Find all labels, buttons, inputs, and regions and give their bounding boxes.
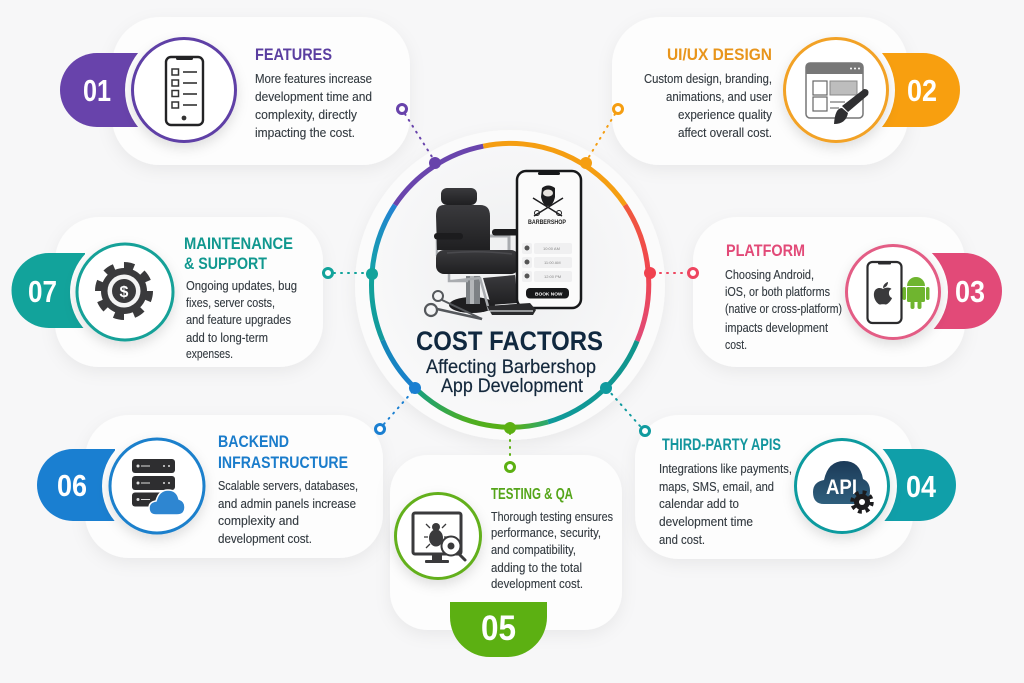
headrest: [441, 188, 477, 205]
subheading line 2: App Development: [441, 376, 584, 397]
card: [55, 217, 323, 367]
description: [491, 510, 613, 591]
colored ring: [372, 143, 649, 427]
number: 06: [57, 468, 87, 503]
number tab: [60, 53, 140, 127]
seat cushion: [436, 250, 519, 274]
panel: 06 backend infrastructure: [37, 415, 383, 558]
heading: & SUPPORT: [184, 254, 268, 273]
connector 04: [600, 382, 650, 436]
heading: INFRASTRUCTURE: [218, 453, 348, 472]
number tab: [37, 449, 115, 521]
description: (native or cross-platform): [725, 302, 842, 316]
phone mockup: 12:00 PM: [544, 274, 561, 279]
seat back: [436, 205, 490, 250]
booking rows: [522, 243, 572, 282]
heading: PLATFORM: [726, 241, 805, 260]
heading: FEATURES: [255, 45, 332, 64]
barber logo head: [541, 186, 555, 206]
description: impacts development: [725, 321, 828, 335]
connector 01: [398, 104, 441, 169]
description: development time: [659, 515, 753, 529]
phone notch: [538, 172, 560, 175]
description: calendar add to: [659, 497, 739, 511]
icon circle: [125, 31, 243, 149]
description: [186, 279, 297, 361]
description: and feature upgrades: [186, 313, 291, 327]
description: maps, SMS, email, and: [659, 480, 774, 494]
number: 07: [28, 274, 57, 309]
description: and admin panels increase: [218, 497, 356, 511]
metal frame: [437, 239, 489, 310]
panel: 01 features: [60, 17, 410, 165]
card: [390, 455, 622, 630]
icon: servers and cloud: [132, 459, 185, 515]
description: Custom design, branding,: [644, 72, 772, 86]
icon: phone with apple and android: [868, 262, 930, 323]
phone body: [517, 171, 581, 308]
description: animations, and user: [666, 90, 772, 104]
description: add to long-term: [186, 331, 268, 345]
phone mockup: [487, 171, 581, 315]
heading: COST FACTORS: [416, 326, 603, 356]
description: performance, security,: [491, 526, 601, 540]
heading: MAINTENANCE: [184, 234, 293, 253]
hub inner disc: [372, 144, 648, 426]
description: Integrations like payments,: [659, 462, 792, 476]
icon: dollar gear: [99, 266, 149, 316]
description: development time and: [255, 90, 372, 104]
icon circle: [102, 431, 212, 541]
number tab: [880, 53, 960, 127]
scissors: [425, 291, 482, 319]
heading: TESTING & QA: [491, 486, 573, 503]
number: 05: [481, 609, 516, 648]
icon: window and brush: [806, 63, 868, 124]
card: [112, 17, 410, 165]
connector 06: [376, 382, 421, 434]
panel: 05 testing and qa: [390, 455, 622, 657]
number: 02: [907, 73, 937, 108]
description: development cost.: [218, 532, 312, 546]
description: [218, 479, 358, 546]
subheading line 1: Affecting Barbershop: [426, 357, 596, 378]
description: complexity and: [218, 514, 299, 528]
connectors: [324, 104, 698, 472]
chair column: [466, 276, 480, 304]
number: 01: [83, 73, 111, 108]
number: 03: [955, 274, 985, 309]
panel: 03 platform: [693, 217, 1002, 367]
card: [635, 415, 913, 559]
card: [85, 415, 383, 558]
description: Choosing Android,: [725, 268, 814, 282]
connector 03: [644, 267, 698, 279]
connector 05: [504, 422, 516, 472]
description: iOS, or both platforms: [725, 285, 830, 299]
icon circle: [838, 237, 948, 347]
hub halo: [355, 130, 665, 440]
description: [644, 72, 773, 140]
book now button: [526, 288, 569, 298]
chair footrest: [487, 303, 536, 315]
heading: [184, 234, 293, 273]
description: and cost.: [659, 533, 705, 547]
connector 02: [580, 104, 622, 169]
icon circle: [70, 237, 180, 347]
card: [612, 17, 908, 165]
icon circle: [787, 431, 897, 541]
panel: 02 ui/ux design: [612, 17, 960, 165]
number tab: [450, 602, 547, 657]
description: complexity, directly: [255, 108, 358, 122]
central title: [416, 326, 603, 397]
phone mockup: 11:00 AM: [544, 260, 561, 265]
crossed scissors: [533, 198, 563, 216]
icon: monitor with bug and magnifier: [413, 513, 465, 563]
panel: 04 third-party apis: [635, 415, 956, 559]
chair base: [449, 297, 495, 313]
heading: BACKEND: [218, 432, 289, 451]
description: impacting the cost.: [255, 126, 355, 140]
description: Ongoing updates, bug: [186, 279, 297, 293]
description: Thorough testing ensures: [491, 510, 613, 524]
description: expenses.: [186, 347, 233, 361]
description: [255, 72, 372, 140]
description: cost.: [725, 338, 747, 352]
central hub: [355, 130, 665, 440]
icon circle: [777, 31, 895, 149]
barber chair illustration: [425, 188, 520, 319]
description: affect overall cost.: [678, 126, 772, 140]
panel: 07 maintenance and support: [12, 217, 323, 367]
number: 04: [906, 469, 937, 504]
description: experience quality: [678, 108, 773, 122]
heading: THIRD-PARTY APIS: [662, 435, 781, 454]
connector 07: [324, 268, 378, 280]
number tab: [875, 449, 956, 521]
heading: [218, 432, 348, 472]
description: [659, 462, 792, 547]
logo label: BARBERSHOP: [528, 220, 566, 226]
number tab: [930, 253, 1002, 329]
leg panel: [483, 275, 518, 305]
phone mockup: BOOK NOW: [535, 292, 563, 298]
card: [693, 217, 965, 367]
icon: dollar gear: $: [120, 284, 128, 301]
description: [725, 268, 842, 352]
description: adding to the total: [491, 561, 582, 575]
icon: api cloud with gear: [813, 461, 872, 512]
icon: api cloud with gear: API: [826, 476, 857, 499]
heading: UI/UX DESIGN: [667, 45, 772, 64]
phone mockup: 10:00 AM: [543, 246, 560, 251]
number tab: [12, 253, 85, 328]
description: More features increase: [255, 72, 372, 86]
description: Scalable servers, databases,: [218, 479, 358, 493]
icon: phone checklist: [166, 57, 203, 125]
icon circle: [396, 494, 480, 578]
description: and compatibility,: [491, 543, 576, 557]
armrests: [434, 233, 463, 240]
description: development cost.: [491, 577, 583, 591]
description: fixes, server costs,: [186, 296, 275, 310]
